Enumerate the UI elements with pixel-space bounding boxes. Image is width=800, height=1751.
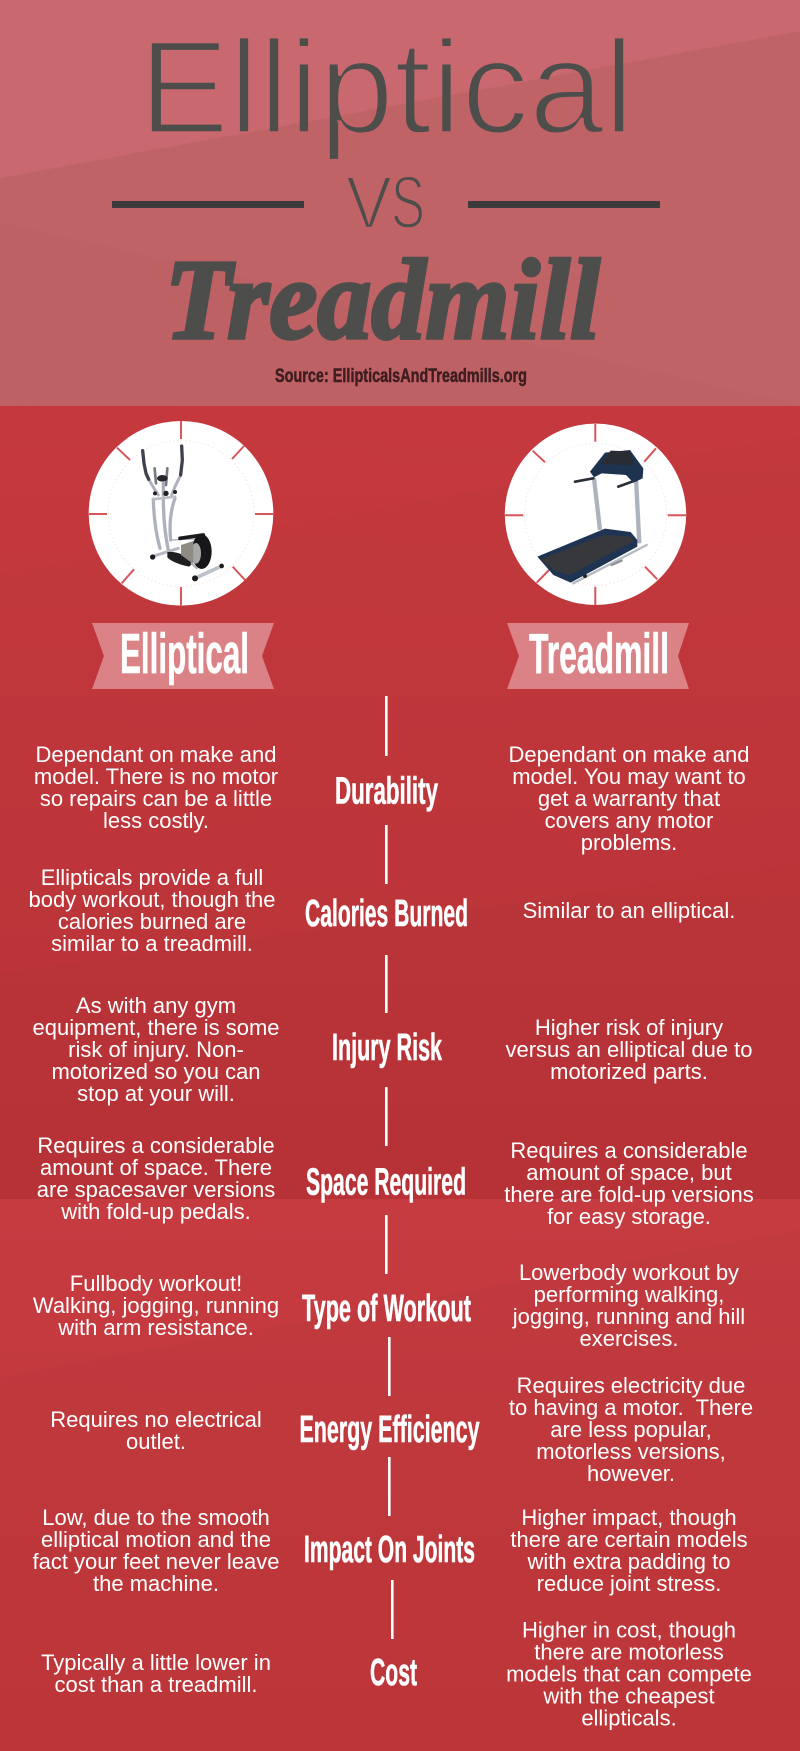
treadmill text: Lowerbody workout by	[519, 1260, 739, 1285]
treadmill text: model. You may want to	[512, 764, 746, 789]
elliptical text: Dependant on make and	[36, 742, 276, 767]
treadmill text: Higher in cost, though	[522, 1618, 736, 1642]
treadmill text: performing walking,	[534, 1282, 724, 1307]
elliptical text: so repairs can be a little	[40, 786, 272, 811]
elliptical text: motorized so you can	[51, 1059, 261, 1084]
row: space required	[37, 1133, 754, 1229]
elliptical text: risk of injury. Non-	[68, 1037, 244, 1062]
title: Elliptical: Elliptical	[139, 14, 634, 162]
row: cost	[41, 1618, 752, 1730]
label: Energy Efficiency	[300, 1409, 480, 1451]
treadmill text: Requires a considerable	[510, 1138, 748, 1163]
elliptical text: As with any gym	[76, 993, 236, 1018]
treadmill text: with extra padding to	[526, 1549, 731, 1574]
background	[0, 406, 800, 1751]
label: Space Required	[306, 1162, 466, 1204]
elliptical text: amount of space. There	[40, 1155, 272, 1180]
elliptical text: the machine.	[93, 1571, 219, 1596]
treadmill text: Higher risk of injury	[535, 1015, 723, 1040]
elliptical text: outlet.	[126, 1429, 186, 1454]
treadmill text: there are certain models	[510, 1527, 748, 1552]
title: Treadmill: Treadmill	[165, 236, 600, 363]
treadmill text: reduce joint stress.	[537, 1571, 721, 1596]
treadmill text: Higher impact, though	[521, 1505, 737, 1530]
treadmill text: get a warranty that	[538, 786, 720, 811]
elliptical text: Low, due to the smooth	[42, 1505, 270, 1530]
treadmill text: there are motorless	[534, 1640, 724, 1664]
elliptical text: with arm resistance.	[57, 1315, 254, 1340]
treadmill text: amount of space, but	[526, 1160, 732, 1185]
title: VS: S	[391, 161, 425, 244]
treadmill text: are less popular,	[550, 1417, 712, 1442]
treadmill text: Requires electricity due	[517, 1373, 745, 1398]
treadmill text: exercises.	[579, 1326, 679, 1351]
treadmill text: motorless versions,	[536, 1439, 726, 1464]
icon: elliptical machine in circle	[89, 421, 273, 606]
treadmill text: versus an elliptical due to	[505, 1037, 753, 1062]
elliptical text: Fullbody workout!	[70, 1271, 242, 1296]
label: Calories Burned	[305, 893, 468, 935]
treadmill text: covers any motor	[545, 808, 713, 833]
banner: Elliptical: Elliptical	[120, 622, 249, 686]
title: VS	[346, 161, 425, 244]
label: Durability	[335, 770, 438, 812]
label: Type of Workout	[302, 1288, 471, 1330]
source line: Source: EllipticalsAndTreadmills.org	[275, 366, 527, 387]
elliptical text: calories burned are	[58, 909, 246, 934]
treadmill text: Similar to an elliptical.	[523, 898, 735, 923]
treadmill text: ellipticals.	[581, 1706, 677, 1730]
elliptical text: body workout, though the	[28, 887, 276, 912]
label: Injury Risk	[332, 1027, 442, 1069]
elliptical text: stop at your will.	[77, 1081, 235, 1106]
treadmill text: to having a motor. There	[509, 1395, 753, 1420]
treadmill text: motorized parts.	[550, 1059, 708, 1084]
elliptical text: Typically a little lower in	[41, 1650, 271, 1675]
row: injury risk	[32, 993, 753, 1106]
treadmill text: Dependant on make and	[509, 742, 749, 767]
treadmill text: problems.	[581, 830, 677, 855]
elliptical text: Requires a considerable	[37, 1133, 275, 1158]
treadmill text: models that can compete	[506, 1662, 752, 1686]
divider right	[468, 201, 660, 208]
elliptical text: model. There is no motor	[34, 764, 278, 789]
elliptical text: equipment, there is some	[32, 1015, 280, 1040]
elliptical text: similar to a treadmill.	[51, 931, 253, 956]
elliptical text: fact your feet never leave	[32, 1549, 280, 1574]
icon: treadmill in circle	[505, 424, 686, 605]
banner: Treadmill	[507, 622, 689, 689]
banner: Elliptical	[92, 622, 274, 689]
row: impact on joints	[32, 1505, 748, 1596]
treadmill text: jogging, running and hill	[512, 1304, 745, 1329]
row: type of workout	[33, 1260, 745, 1351]
row: energy efficiency	[50, 1373, 753, 1486]
label: Impact On Joints	[304, 1529, 475, 1571]
panel: header	[0, 0, 800, 406]
elliptical text: less costly.	[103, 808, 209, 833]
banner: Treadmill: Treadmill	[529, 622, 669, 686]
treadmill text: however.	[587, 1461, 675, 1486]
elliptical text: Ellipticals provide a full	[41, 865, 263, 890]
title: VS: V	[346, 161, 393, 244]
treadmill text: with the cheapest	[542, 1684, 715, 1708]
elliptical text: with fold-up pedals.	[60, 1199, 251, 1224]
elliptical text: cost than a treadmill.	[55, 1672, 257, 1697]
row: durability	[34, 742, 749, 855]
row: calories burned	[28, 865, 735, 956]
center connector lines	[385, 696, 394, 1639]
elliptical text: Requires no electrical	[50, 1407, 262, 1432]
divider left	[112, 201, 304, 208]
elliptical text: are spacesaver versions	[37, 1177, 275, 1202]
treadmill text: for easy storage.	[547, 1204, 711, 1229]
elliptical text: elliptical motion and the	[41, 1527, 271, 1552]
treadmill text: there are fold-up versions	[504, 1182, 754, 1207]
label: Cost	[370, 1652, 417, 1694]
elliptical text: Walking, jogging, running	[33, 1293, 279, 1318]
